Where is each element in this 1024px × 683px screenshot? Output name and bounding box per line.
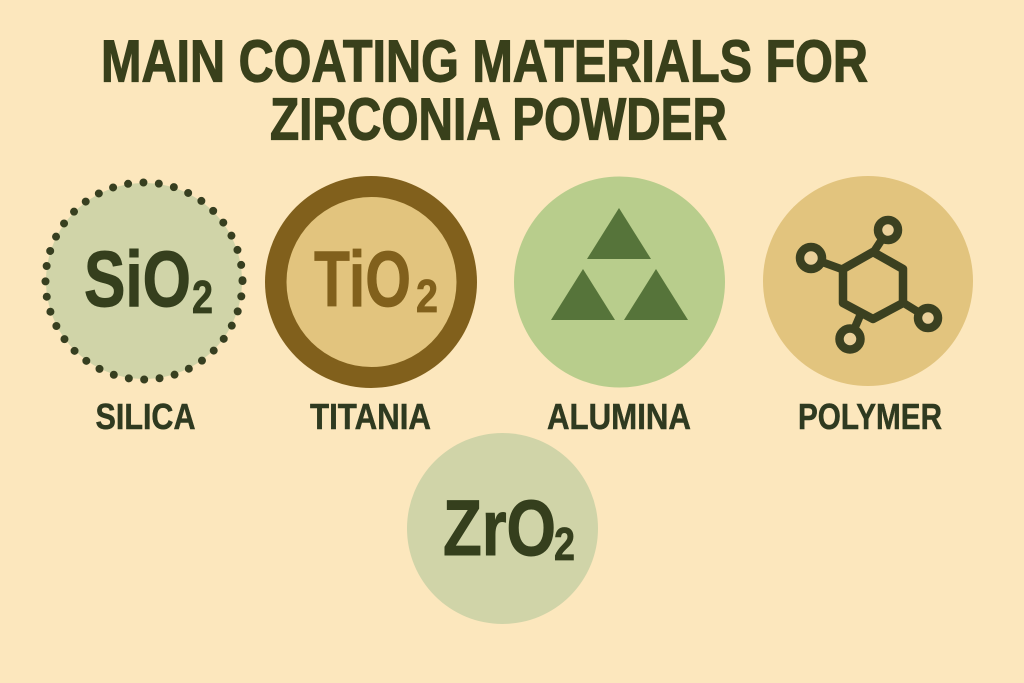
title xyxy=(101,28,868,152)
icon: zirconia core circle xyxy=(407,433,598,624)
title: MAIN COATING MATERIALS FOR xyxy=(101,28,868,94)
label: silica: SILICA xyxy=(96,396,196,437)
icon: silica dotted circle: SiO xyxy=(84,234,191,323)
icon: titania ring xyxy=(265,176,477,388)
title: ZIRCONIA POWDER xyxy=(270,86,727,152)
panel: polymer xyxy=(763,176,973,437)
icon: silica dotted circle: 2 xyxy=(192,271,213,323)
label: titania: TITANIA xyxy=(310,396,431,437)
panel: alumina xyxy=(514,176,725,437)
icon: zirconia core circle: ZrO xyxy=(443,483,556,572)
label: polymer: POLYMER xyxy=(798,396,942,437)
panel: titania xyxy=(265,176,477,437)
icon: titania ring: TiO xyxy=(314,234,411,323)
label: alumina: ALUMINA xyxy=(547,396,691,437)
panel: silica xyxy=(46,182,242,437)
icon: titania ring: 2 xyxy=(416,270,438,322)
icon: alumina triangles xyxy=(514,176,725,388)
icon: zirconia core circle: 2 xyxy=(554,518,575,570)
icon: silica dotted circle xyxy=(46,182,242,380)
icon: polymer molecule xyxy=(763,176,973,386)
